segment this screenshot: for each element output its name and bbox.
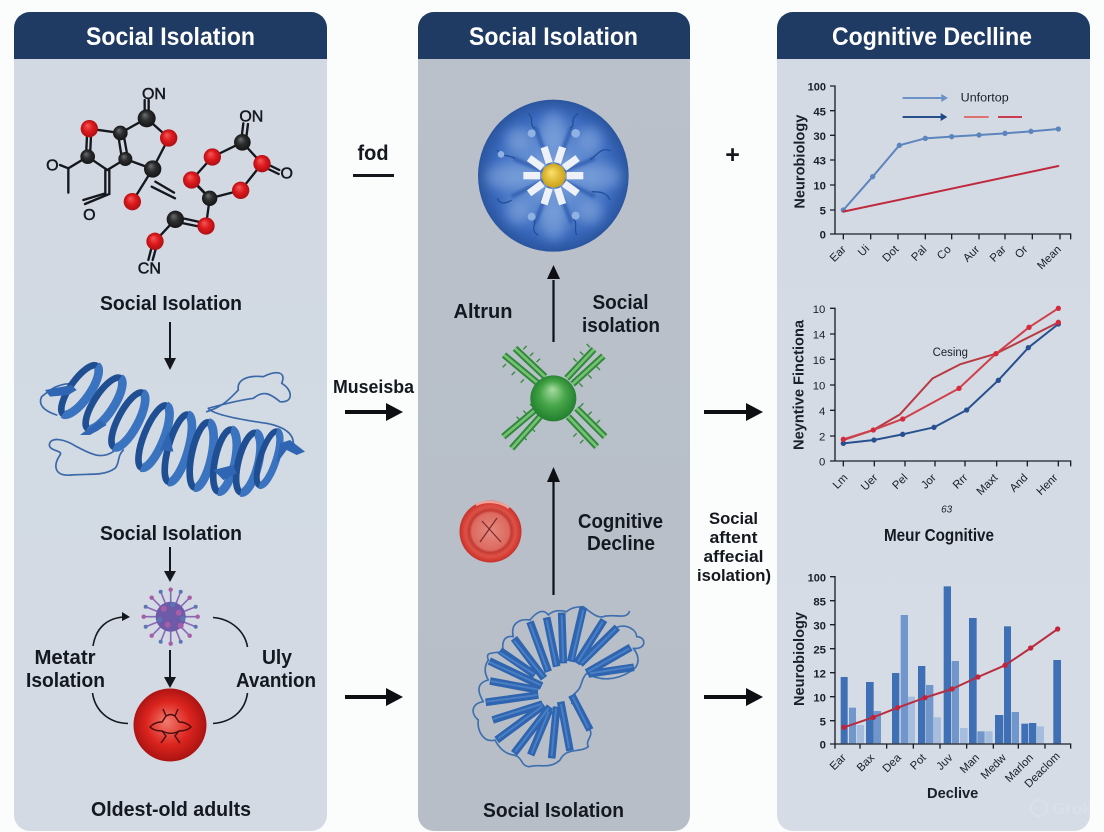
chart: top line chart: [792, 82, 1071, 272]
connector label: social aftent: isolation): [697, 567, 771, 585]
x tick labels: Deaclom: [1023, 750, 1063, 790]
arrow: middle to right lower: [704, 688, 763, 706]
y tick labels: 12: [813, 668, 826, 680]
protein ribbon ring: [473, 607, 644, 767]
y tick labels: 5: [820, 206, 826, 218]
y tick labels: 43: [813, 156, 826, 168]
connector label: social aftent: Social: [709, 510, 758, 528]
chart: middle line chart: [792, 304, 1071, 515]
y tick labels: [813, 304, 825, 469]
series: red line: [841, 626, 1060, 730]
bars: light: [857, 697, 1044, 743]
label: metatr isolation: Metatr: [34, 647, 96, 669]
label: altrun: Altrun: [454, 301, 512, 323]
atom labels: O: [280, 166, 293, 183]
y tick labels: [808, 82, 826, 242]
label: uly avantion: Uly: [262, 647, 293, 669]
x tick labels: Marlon: [1003, 752, 1036, 785]
heading: right: Cognitive Declline: [832, 23, 1032, 51]
x tick labels: Uer: [859, 472, 881, 493]
label: social isolation mid: [582, 292, 660, 337]
connector label: museisba: Museisba: [333, 377, 415, 397]
connector label: social aftent: affecial: [704, 548, 764, 566]
arrow: middle to right upper: [704, 403, 763, 421]
arrow: left to middle lower: [345, 688, 403, 706]
connector label: social aftent: [697, 510, 771, 585]
y tick labels: 45: [813, 106, 826, 118]
y tick labels: 25: [813, 644, 826, 656]
axes: [830, 308, 1071, 466]
heading: middle: Social Isolation: [469, 23, 638, 51]
x tick labels: [831, 471, 1061, 498]
atom labels: O: [46, 158, 59, 175]
y tick labels: 30: [813, 131, 826, 143]
connector label: fod: fod: [358, 142, 388, 165]
icon: red x disc: [460, 500, 522, 562]
x tick labels: Pot: [908, 751, 929, 772]
label: cognitive decline mid: Decline: [587, 533, 655, 555]
label: uly avantion: Avantion: [236, 670, 316, 692]
icon: virus particle: [142, 588, 200, 646]
arrow: down 3: [164, 650, 176, 688]
x tick labels: Or: [1013, 243, 1031, 261]
axes: [830, 86, 1071, 239]
x tick labels: Man: [958, 752, 982, 776]
label: social isolation 1: Social Isolation: [100, 293, 242, 315]
atom labels: O: [83, 207, 96, 224]
label: social isolation mid: isolation: [582, 315, 660, 337]
x tick labels: Pal: [909, 244, 929, 264]
atoms: carbon: [80, 109, 251, 228]
y tick labels: 85: [813, 596, 826, 608]
protein ribbon coil: [40, 360, 305, 495]
y tick labels: 30: [813, 620, 826, 632]
watermark: [1031, 799, 1092, 818]
series: blue: [841, 126, 1061, 213]
series: red: [843, 166, 1058, 212]
x tick labels: Ui: [856, 243, 872, 259]
bars: dark: [841, 586, 1061, 743]
icon: green cross molecule: [503, 344, 605, 448]
y tick labels: 10: [813, 304, 825, 316]
y tick labels: 16: [813, 355, 825, 367]
atom labels: ON: [142, 86, 166, 103]
label: social isolation mid: Social: [592, 292, 648, 314]
label: cognitive decline mid: Cognitive: [578, 511, 663, 533]
y tick labels: 100: [808, 572, 826, 584]
x tick labels: And: [1008, 472, 1030, 495]
x tick labels: Henr: [1035, 472, 1061, 498]
label: social isolation bottom: Social Isolation: [483, 800, 624, 822]
white radial bars: [523, 146, 583, 205]
y tick labels: 0: [819, 457, 825, 469]
icon: blue receptor sphere: [478, 100, 629, 252]
series: red curve: [843, 322, 1058, 440]
cycle arcs: [92, 612, 248, 724]
icon: red sphere: [134, 688, 206, 762]
y tick labels: [808, 572, 826, 752]
y tick labels: 10: [813, 692, 826, 704]
panel: middle column: [418, 12, 690, 831]
x tick labels: Medw: [979, 751, 1009, 782]
x tick labels: Lm: [831, 472, 850, 492]
x tick labels: Rrr: [951, 472, 971, 492]
panel: right column: [777, 12, 1090, 831]
x tick labels: Dot: [880, 243, 902, 265]
label: metatr isolation: Isolation: [26, 670, 105, 692]
series: red markers: [841, 306, 1061, 442]
x tick labels: Mean: [1035, 244, 1064, 272]
small mark: 63: [941, 504, 953, 515]
y tick labels: 2: [819, 432, 825, 444]
atom labels: CN: [138, 260, 161, 277]
watermark: Grok: [1052, 799, 1092, 818]
y axis title: Neyntive Finctiona: [792, 319, 808, 450]
chart: bottom combo chart: [792, 572, 1071, 802]
molecule diagram: [46, 86, 293, 277]
x tick labels: Par: [988, 243, 1009, 265]
coil loops: [55, 360, 285, 495]
x tick labels: Juv: [934, 752, 956, 773]
axes: [830, 577, 1071, 749]
arrow: down 2: [164, 547, 176, 582]
y tick labels: 0: [820, 740, 826, 752]
atoms: oxygen: [81, 120, 271, 250]
bars: mid: [849, 615, 1019, 743]
legend: [903, 91, 1022, 121]
connector label: social aftent: aftent: [710, 529, 758, 547]
label: cognitive decline mid: [578, 511, 663, 555]
label: oldest-old adults: Oldest-old adults: [91, 799, 251, 821]
y tick labels: 14: [813, 330, 825, 342]
legend: Unfortop: [961, 91, 1009, 105]
y axis title: Neurobiology: [792, 115, 808, 209]
label: social isolation 2: Social Isolation: [100, 523, 242, 545]
x tick labels: [828, 243, 1064, 272]
chart title: meur cognitive: Meur Cognitive: [884, 525, 994, 545]
y tick labels: 100: [808, 82, 826, 94]
x tick labels: Jor: [919, 472, 939, 492]
label: uly avantion: [236, 647, 316, 692]
arrow: up to sphere: [547, 265, 560, 342]
series annotation: Cesing: [933, 345, 968, 359]
x axis title: Declive: [927, 785, 978, 802]
y tick labels: 10: [813, 381, 825, 393]
x tick labels: Pel: [890, 472, 910, 492]
y tick labels: 5: [820, 716, 826, 728]
x tick labels: Bax: [855, 752, 877, 774]
heading: left: Social Isolation: [86, 23, 255, 51]
x tick labels: Aur: [961, 243, 982, 265]
x tick labels: Ear: [828, 752, 849, 773]
series: blue: [841, 321, 1061, 446]
y tick labels: 0: [820, 230, 826, 242]
x tick labels: Co: [935, 244, 954, 262]
arrow: left to middle upper: [345, 403, 403, 421]
atom labels: ON: [239, 108, 263, 125]
connector label: fod: [353, 142, 394, 177]
y axis title: Neurobiology: [792, 612, 808, 706]
label: metatr isolation: [26, 647, 105, 692]
x tick labels: Dea: [881, 751, 904, 775]
arrow: down 1: [164, 322, 176, 370]
x tick labels: Ear: [828, 243, 849, 265]
x tick labels: Maxt: [975, 471, 1001, 498]
panel: left column: [14, 12, 327, 831]
y tick labels: 4: [819, 406, 825, 418]
y tick labels: 10: [813, 181, 826, 193]
plus sign: +: [725, 141, 740, 169]
x tick labels: [828, 750, 1063, 790]
atom labels: [46, 86, 293, 277]
arrow: up to green molecule: [547, 467, 560, 595]
